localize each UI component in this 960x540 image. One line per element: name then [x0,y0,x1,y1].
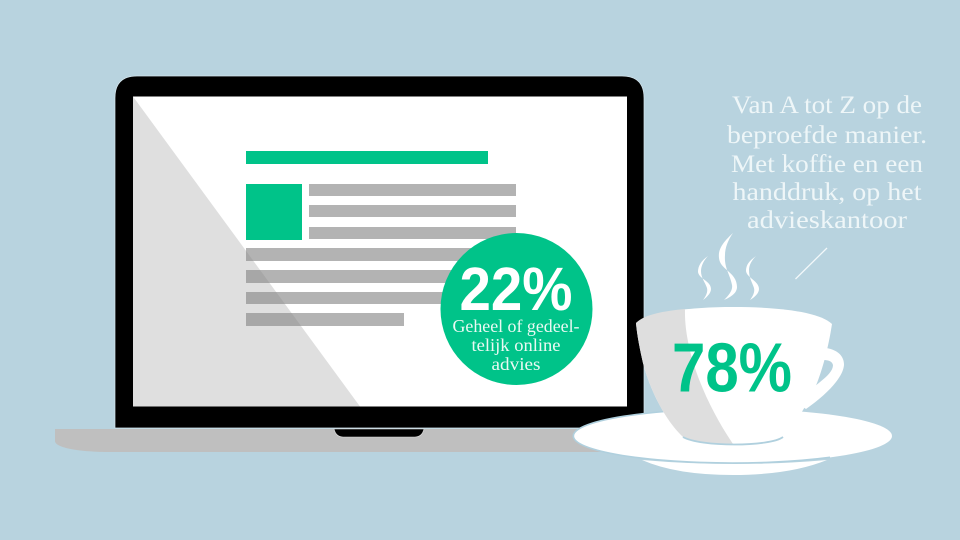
22% figure: 22% [460,255,572,323]
laptop base [55,429,610,452]
saucer [574,409,892,463]
badge caption: advies [492,354,540,374]
cup handle [800,348,844,409]
laptop notch [334,429,424,437]
quote text: Met koffie en een [731,151,924,178]
saucer rim outline [573,410,830,463]
quote text [727,92,927,234]
coffee cup and saucer [573,307,892,475]
quote text: advieskantoor [747,207,908,234]
badge caption: telijk online [472,335,561,355]
screen reflection [133,96,360,406]
document text lines [246,184,516,326]
pointer line [796,248,827,279]
document image block [246,184,302,240]
badge caption: Geheel of gedeel- [452,316,580,336]
78% figure: 78% [672,328,792,406]
cup base outline [683,437,783,444]
document heading bar [246,151,488,164]
quote text: Van A tot Z op de [732,92,922,119]
quote text: beproefde manier. [727,122,927,149]
saucer lower rim [642,460,827,475]
badge caption [452,316,580,374]
laptop screen [133,96,627,406]
cup body [636,307,832,445]
badge: 22% online advice [440,233,592,385]
laptop [55,76,644,452]
icon: steam [698,233,759,300]
laptop lid [115,76,644,428]
cup shadow [636,309,733,444]
quote text: handdruk, op het [732,179,922,206]
